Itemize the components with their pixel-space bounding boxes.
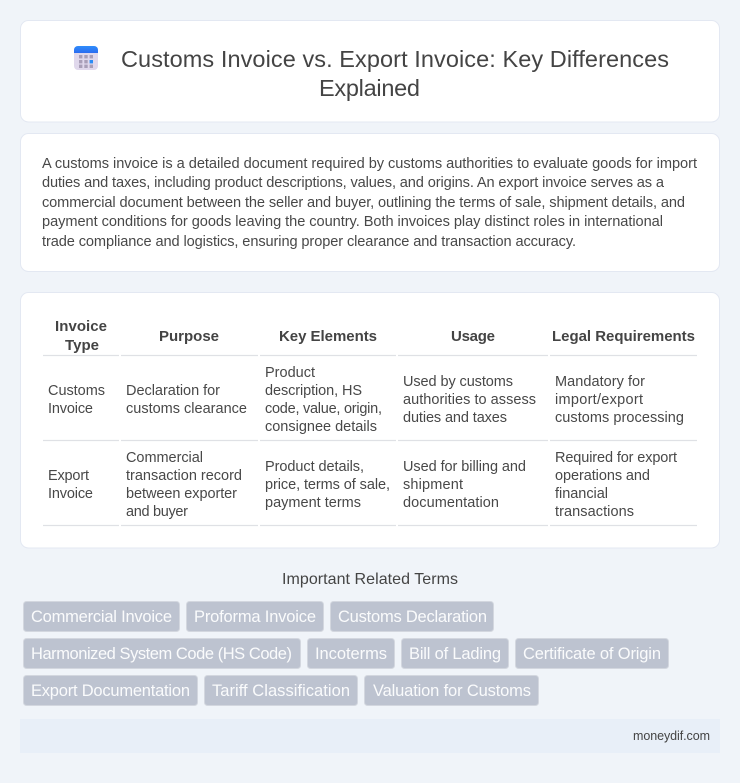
table row: customs invoice: import/export <box>555 392 643 408</box>
tag: commercial invoice: Commercial Invoice <box>31 608 172 626</box>
tag: tariff classification: Tariff Classification <box>212 682 350 700</box>
title <box>121 46 669 101</box>
tag: certificate of origin <box>516 638 668 668</box>
table row: export invoice: and buyer <box>126 504 188 520</box>
tag: export documentation: Export Documentation <box>31 682 190 700</box>
tag: customs declaration: Customs Declaration <box>338 608 487 626</box>
text block: intro paragraph: trade compliance and logistics, ensuring proper clearance and transaction accuracy. <box>42 234 576 250</box>
tag: tariff classification <box>204 676 358 706</box>
table header row: Invoice <box>55 318 107 335</box>
table row: export invoice: Used for billing and <box>403 459 526 475</box>
table row: customs invoice: code, value, origin, <box>265 401 382 417</box>
table header row: Usage <box>451 328 495 345</box>
tag: proforma invoice: Proforma Invoice <box>194 608 316 626</box>
table row: export invoice <box>48 450 677 520</box>
table row: customs invoice: Invoice <box>48 401 93 417</box>
table row: customs invoice: duties and taxes <box>403 410 507 426</box>
table row: export invoice: payment terms <box>265 495 361 511</box>
table row: customs invoice: consignee details <box>265 419 377 435</box>
table header row: Legal Requirements <box>552 328 695 345</box>
footer <box>20 719 720 753</box>
icon: calendar <box>74 46 98 70</box>
tag: customs declaration <box>330 602 494 632</box>
table row: customs invoice <box>48 365 684 435</box>
tag: certificate of origin: Certificate of Origin <box>523 645 661 663</box>
table row: customs invoice: Customs <box>48 383 105 399</box>
tag: valuation for customs <box>364 676 538 706</box>
text block: intro paragraph <box>42 156 697 250</box>
table row: export invoice: financial <box>555 486 608 502</box>
table row: export invoice: Invoice <box>48 486 93 502</box>
tag: incoterms <box>308 638 394 668</box>
table row: customs invoice: Declaration for <box>126 383 220 399</box>
tag: incoterms: Incoterms <box>315 645 387 663</box>
title: Customs Invoice vs. Export Invoice: Key Differences <box>121 46 669 72</box>
text block: intro paragraph: payment conditions for goods leaving the country. Both invoices play distinct roles in international <box>42 214 663 230</box>
tag: bill of lading: Bill of Lading <box>409 645 501 663</box>
table header row <box>55 318 695 354</box>
table row: customs invoice: authorities to assess <box>403 392 536 408</box>
tag: export documentation <box>24 676 198 706</box>
text block: intro paragraph: A customs invoice is a detailed document required by customs authorities to evaluate goods for import <box>42 156 697 172</box>
table row: export invoice: Export <box>48 468 89 484</box>
table row: export invoice: transactions <box>555 504 634 520</box>
tag: valuation for customs: Valuation for Customs <box>373 682 531 700</box>
heading: important related terms: Important Related Terms <box>282 571 458 588</box>
table row: export invoice: between exporter <box>126 486 237 502</box>
table header row: Purpose <box>159 328 219 345</box>
table row: export invoice: Required for export <box>555 450 677 466</box>
table row: export invoice: operations and <box>555 468 650 484</box>
table row: export invoice: Product details, <box>265 459 364 475</box>
table row: customs invoice: customs processing <box>555 410 684 426</box>
table row: export invoice: documentation <box>403 495 499 511</box>
table header row: Type <box>65 337 99 354</box>
tag: harmonized system code: Harmonized System Code (HS Code) <box>31 645 292 663</box>
footer: moneydif.com <box>633 729 710 743</box>
table row: export invoice: shipment <box>403 477 463 493</box>
table row: customs invoice: description, HS <box>265 383 362 399</box>
table row: export invoice: price, terms of sale, <box>265 477 390 493</box>
tag list <box>24 602 668 706</box>
text block: intro paragraph: duties and taxes, including product descriptions, values, and origins. An export invoice serves as a <box>42 175 665 191</box>
table row: customs invoice: Mandatory for <box>555 374 645 390</box>
tag: bill of lading <box>402 638 508 668</box>
table row: customs invoice: Used by customs <box>403 374 513 390</box>
panel: introduction <box>20 134 720 272</box>
table row: export invoice: Commercial <box>126 450 203 466</box>
title: Explained <box>319 75 420 101</box>
table header row: Key Elements <box>279 328 377 345</box>
table row: customs invoice: Product <box>265 365 315 381</box>
tag: proforma invoice <box>186 602 324 632</box>
table row: export invoice: transaction record <box>126 468 242 484</box>
tag: commercial invoice <box>24 602 180 632</box>
panel: comparison table <box>20 292 720 548</box>
table row: customs invoice: customs clearance <box>126 401 247 417</box>
header panel <box>20 20 720 122</box>
tag: harmonized system code <box>24 638 300 668</box>
text block: intro paragraph: commercial document between the seller and buyer, outlining the terms of sale, shipment details, and <box>42 195 685 211</box>
